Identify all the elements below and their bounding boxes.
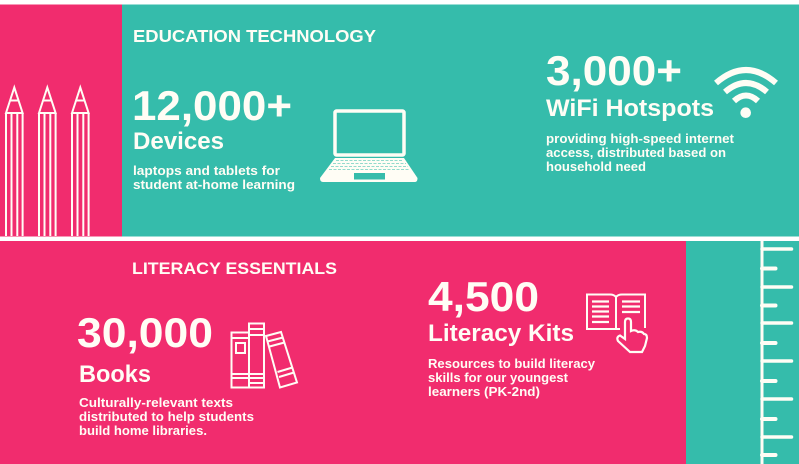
label: devices: Devices <box>133 128 224 155</box>
icon: open book with pointing hand <box>587 294 647 352</box>
icon: laptop <box>320 111 418 182</box>
description: literacy kits: Resources to build literacy <box>428 357 595 371</box>
number: 12,000+: 12,000+ <box>132 82 292 129</box>
icon: wifi <box>716 70 776 118</box>
label: literacy kits: Literacy Kits <box>428 320 574 347</box>
description: books: build home libraries. <box>79 424 207 438</box>
description: wifi hotspots: household need <box>546 160 646 174</box>
icon: pencil 1 <box>6 88 23 236</box>
number: 4,500: 4,500 <box>428 273 539 320</box>
stat: 30,000 books <box>77 309 257 438</box>
heading: education technology: EDUCATION TECHNOLOGY <box>133 26 376 46</box>
number: 30,000: 30,000 <box>77 309 213 356</box>
stat: 4,500 literacy kits <box>428 273 598 399</box>
panel: education technology <box>122 4 799 236</box>
label: wifi hotspots: WiFi Hotspots <box>546 95 714 122</box>
stat: 3,000+ wifi hotspots <box>546 47 737 174</box>
description: literacy kits: skills for our youngest <box>428 371 569 385</box>
label: books: Books <box>79 361 151 388</box>
description: devices: student at-home learning <box>133 178 295 192</box>
description: books: Culturally-relevant texts <box>79 396 233 410</box>
description: books: distributed to help students <box>79 410 254 424</box>
icon: pencils <box>6 88 89 236</box>
panel: literacy essentials <box>0 241 686 464</box>
icon: pencil 2 <box>39 88 56 236</box>
stat: 12,000+ devices <box>132 82 295 192</box>
description: wifi hotspots: access, distributed based on <box>546 146 726 160</box>
description: wifi hotspots: providing high-speed internet <box>546 132 735 146</box>
panel: ruler column <box>686 241 799 464</box>
number: 3,000+: 3,000+ <box>546 47 682 94</box>
heading: literacy essentials: LITERACY ESSENTIALS <box>132 260 337 278</box>
panel: pencil column <box>0 4 122 236</box>
icon: books <box>232 324 297 388</box>
icon: pencil 3 <box>72 88 89 236</box>
description: literacy kits: learners (PK-2nd) <box>428 385 540 399</box>
icon: ruler <box>762 241 792 464</box>
description: devices: laptops and tablets for <box>133 164 280 178</box>
